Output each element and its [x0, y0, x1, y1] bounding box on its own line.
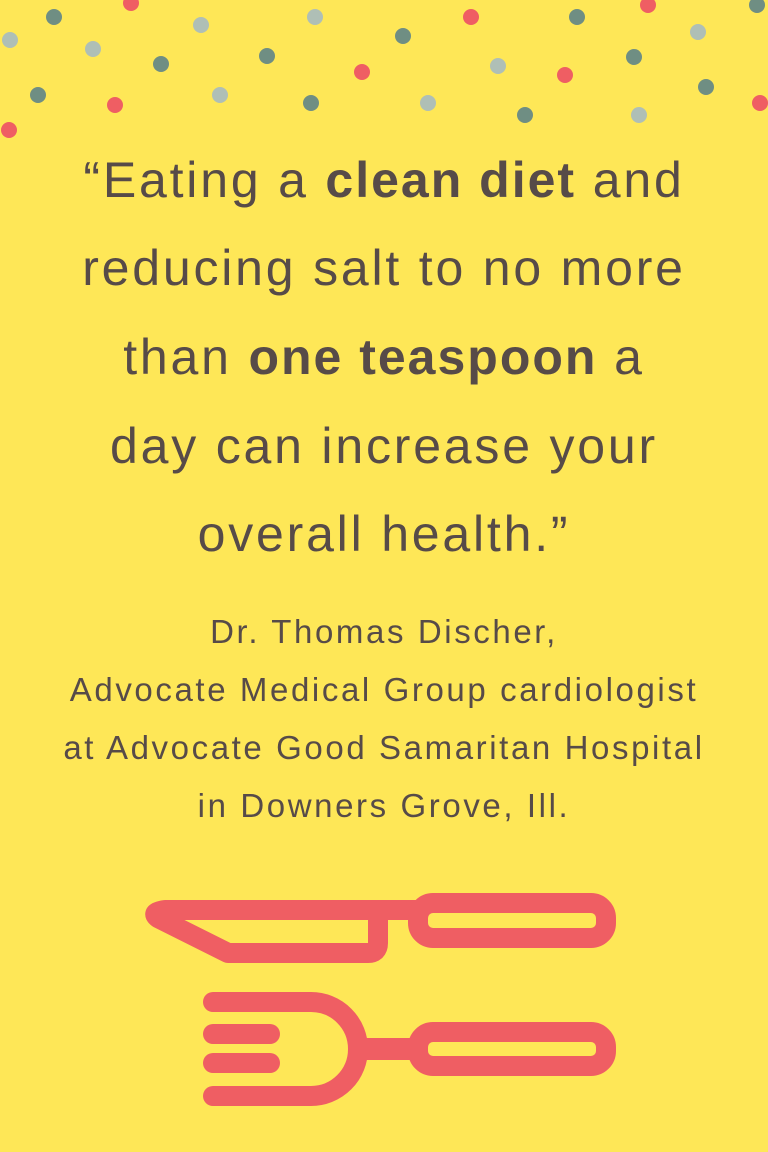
attribution: Dr. Thomas Discher, [210, 613, 558, 650]
attribution: at Advocate Good Samaritan Hospital [63, 729, 705, 766]
fork [213, 1002, 606, 1096]
quote text: “Eating a clean diet and [83, 152, 685, 208]
attribution [63, 613, 705, 824]
knife [155, 903, 606, 953]
quote text: overall health.” [198, 506, 570, 562]
attribution: Advocate Medical Group cardiologist [70, 671, 698, 708]
icon: knife and fork [145, 893, 616, 1106]
quote text: than one teaspoon a [123, 329, 645, 385]
quote text [82, 152, 686, 562]
confetti dots [1, 0, 768, 138]
attribution: in Downers Grove, Ill. [198, 787, 570, 824]
quote text: reducing salt to no more [82, 240, 686, 296]
quote text: day can increase your [110, 418, 658, 474]
